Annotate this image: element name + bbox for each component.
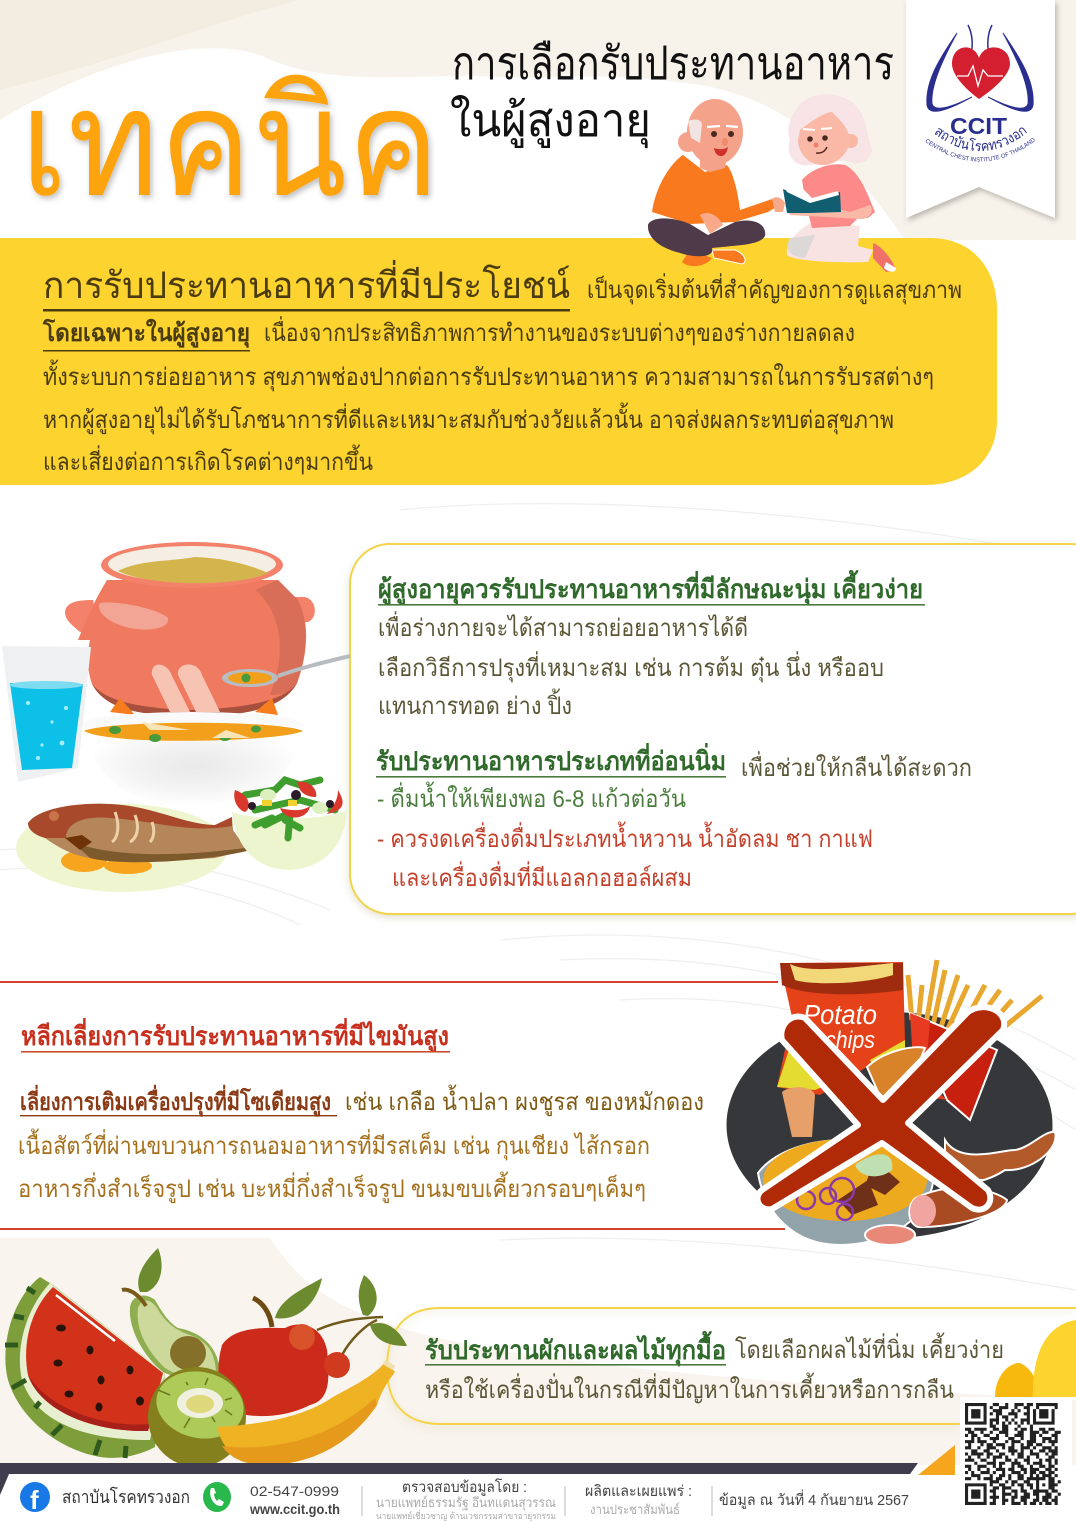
footer: facebook bbox=[20, 1482, 190, 1515]
phone and website: www.ccit.go.th bbox=[249, 1501, 340, 1517]
soft foods heading: ผู้สูงอายุควรรับประทานอาหารที่มีลักษณะนุ่ม เคี้ยวง่าย bbox=[378, 569, 923, 606]
fruit text bbox=[425, 1332, 1004, 1404]
fruit heading: รับประทานผักและผลไม้ทุกมื้อ bbox=[425, 1330, 726, 1367]
logo: CCIT: CCIT bbox=[950, 113, 1007, 139]
facebook name: สถาบันโรคทรวงอก bbox=[62, 1486, 190, 1507]
fruit text: หรือใช้เครื่องปั่นในกรณีที่มีปัญหาในการเคี้ยวหรือการกลืน bbox=[425, 1372, 954, 1404]
logo ribbon bbox=[905, 0, 1060, 222]
apple bbox=[218, 1275, 407, 1416]
logo: lungs and heart bbox=[927, 25, 1033, 111]
intro text: หากผู้สูงอายุไม่ได้รับโภชนาการที่ดีและเหมาะสมกับช่วงวัยแล้วนั้น อาจส่งผลกระทบต่อสุขภาพ bbox=[43, 402, 894, 435]
footer separators bbox=[362, 1486, 712, 1516]
subtitle: ในผู้สูงอายุ bbox=[450, 94, 651, 149]
avoid text: เนื้อสัตว์ที่ผ่านขบวนการถนอมอาหารที่มีรสเค็ม เช่น กุนเชียง ไส้กรอก bbox=[18, 1128, 650, 1161]
footer: date: ข้อมูล ณ วันที่ 4 กันยายน 2567 bbox=[719, 1489, 909, 1509]
decorative yellow petals bbox=[995, 1320, 1076, 1397]
subtitle bbox=[450, 37, 894, 149]
intro text: โดยเฉพาะในผู้สูงอายุ bbox=[42, 318, 250, 349]
logo ribbon: CENTRAL CHEST INSTITUTE OF THAILAND bbox=[926, 138, 1034, 162]
QR code bbox=[960, 1397, 1072, 1508]
footer: published by: ผลิตและเผยแพร่ : bbox=[585, 1483, 692, 1500]
kiwi bbox=[148, 1364, 250, 1467]
intro text: เป็นจุดเริ่มต้นที่สำคัญของการดูแลสุขภาพ bbox=[587, 273, 962, 305]
illustration: fruits bbox=[5, 1248, 407, 1467]
panel: soft foods bbox=[350, 544, 1076, 914]
intro text: เนื่องจากประสิทธิภาพการทำงานของระบบต่างๆของร่างกายลดลง bbox=[264, 316, 855, 347]
fruit text: โดยเลือกผลไม้ที่นิ่ม เคี้ยวง่าย bbox=[735, 1332, 1004, 1364]
avoid text bbox=[18, 1084, 704, 1204]
sodium subheading: เลี่ยงการเติมเครื่องปรุงที่มีโซเดียมสูง bbox=[20, 1084, 331, 1118]
swallowing note: เพื่อช่วยให้กลืนได้สะดวก bbox=[741, 751, 972, 782]
footer: published by: งานประชาสัมพันธ์ bbox=[590, 1502, 680, 1517]
soft foods subheading: รับประทานอาหารประเภทที่อ่อนนิ่ม bbox=[376, 742, 726, 776]
salad bowl bbox=[232, 780, 347, 870]
footer: verified by: นายแพทย์เชี่ยวชาญ ด้านเวชกรรมสาขาอายุรกรรม bbox=[376, 1509, 556, 1522]
chips bag bbox=[777, 962, 905, 1095]
fries bbox=[908, 960, 1042, 1120]
chips bag: Potato bbox=[803, 999, 877, 1030]
plate bbox=[16, 804, 228, 892]
cooking pot bbox=[65, 542, 315, 716]
intro heading: การรับประทานอาหารที่มีประโยชน์ bbox=[43, 259, 570, 306]
avoid heading: หลีกเลี่ยงการรับประทานอาหารที่มีไขมันสูง bbox=[21, 1017, 449, 1053]
man bbox=[648, 99, 785, 266]
pear bbox=[122, 1248, 220, 1380]
logo: institute name bbox=[932, 132, 1028, 151]
spoon bbox=[222, 656, 350, 687]
drinks to avoid bbox=[377, 821, 873, 892]
title: เทคนิค: เทคนิค bbox=[20, 59, 440, 227]
subtitle: การเลือกรับประทานอาหาร bbox=[452, 37, 894, 89]
phone and website bbox=[249, 1483, 340, 1517]
soft foods text: แทนการทอด ย่าง ปิ้ง bbox=[378, 688, 572, 720]
soft foods text: เลือกวิธีการปรุงที่เหมาะสม เช่น การต้ม ตุ๋น นึ่ง หรืออบ bbox=[378, 651, 884, 683]
logo ribbon: สถาบันโรคทรวงอก bbox=[935, 128, 1027, 152]
dark plate bbox=[726, 1012, 1052, 1238]
intro text: ทั้งระบบการย่อยอาหาร สุขภาพช่องปากต่อการรับประทานอาหาร ความสามารถในการรับรสต่างๆ bbox=[43, 359, 934, 392]
footer: verified by: ตรวจสอบข้อมูลโดย : bbox=[402, 1478, 527, 1496]
footer: phone bbox=[203, 1482, 340, 1517]
phone and website: 02-547-0999 bbox=[250, 1483, 339, 1499]
avoid text: อาหารกึ่งสำเร็จรูป เช่น บะหมี่กึ่งสำเร็จรูป ขนมขบเคี้ยวกรอบๆเค็มๆ bbox=[18, 1171, 646, 1204]
banana bbox=[217, 1362, 395, 1465]
woman bbox=[785, 94, 896, 272]
red cross bbox=[757, 1007, 1004, 1210]
footer: verified by bbox=[376, 1478, 556, 1522]
illustration: junk food crossed out bbox=[726, 960, 1056, 1245]
footer: facebook: f bbox=[30, 1485, 39, 1515]
footer: verified by: นายแพทย์ธรรมรัฐ อึนทแดนสุวรรณ bbox=[376, 1495, 556, 1511]
footer: published by bbox=[585, 1483, 692, 1517]
open book bbox=[783, 186, 841, 213]
soft foods text: เพื่อร่างกายจะได้สามารถย่อยอาหารได้ดี bbox=[378, 611, 748, 642]
ice cream cone bbox=[782, 1087, 815, 1137]
drinks to avoid: - ควรงดเครื่องดื่มประเภทน้ำหวาน น้ำอัดลม ชา กาแฟ bbox=[377, 821, 873, 853]
intro text: และเสี่ยงต่อการเกิดโรคต่างๆมากขึ้น bbox=[43, 444, 373, 476]
panel: fruit and vegetables bbox=[387, 1308, 1076, 1424]
panel: foods to avoid bbox=[0, 981, 785, 1230]
illustration: healthy meal bbox=[2, 542, 350, 892]
soft foods text bbox=[378, 611, 884, 720]
illustration: elderly couple bbox=[648, 94, 896, 272]
drinks to avoid: และเครื่องดื่มที่มีแอลกอฮอล์ผสม bbox=[392, 861, 692, 892]
sausages bbox=[865, 1132, 1056, 1245]
fish bbox=[28, 804, 247, 874]
intro text bbox=[42, 273, 962, 476]
footer bar bbox=[0, 1445, 955, 1495]
avoid text: เช่น เกลือ น้ำปลา ผงชูรส ของหมักดอง bbox=[345, 1084, 704, 1117]
water advice: - ดื่มน้ำให้เพียงพอ 6-8 แก้วต่อวัน bbox=[377, 781, 686, 813]
fried chicken bbox=[867, 1047, 925, 1108]
glass of water bbox=[2, 646, 91, 782]
watermelon bbox=[5, 1277, 165, 1458]
chips bag: chips bbox=[825, 1027, 875, 1054]
panel: intro bbox=[0, 238, 997, 485]
soup bowl bbox=[80, 712, 304, 810]
noodle bowl bbox=[758, 1139, 933, 1245]
